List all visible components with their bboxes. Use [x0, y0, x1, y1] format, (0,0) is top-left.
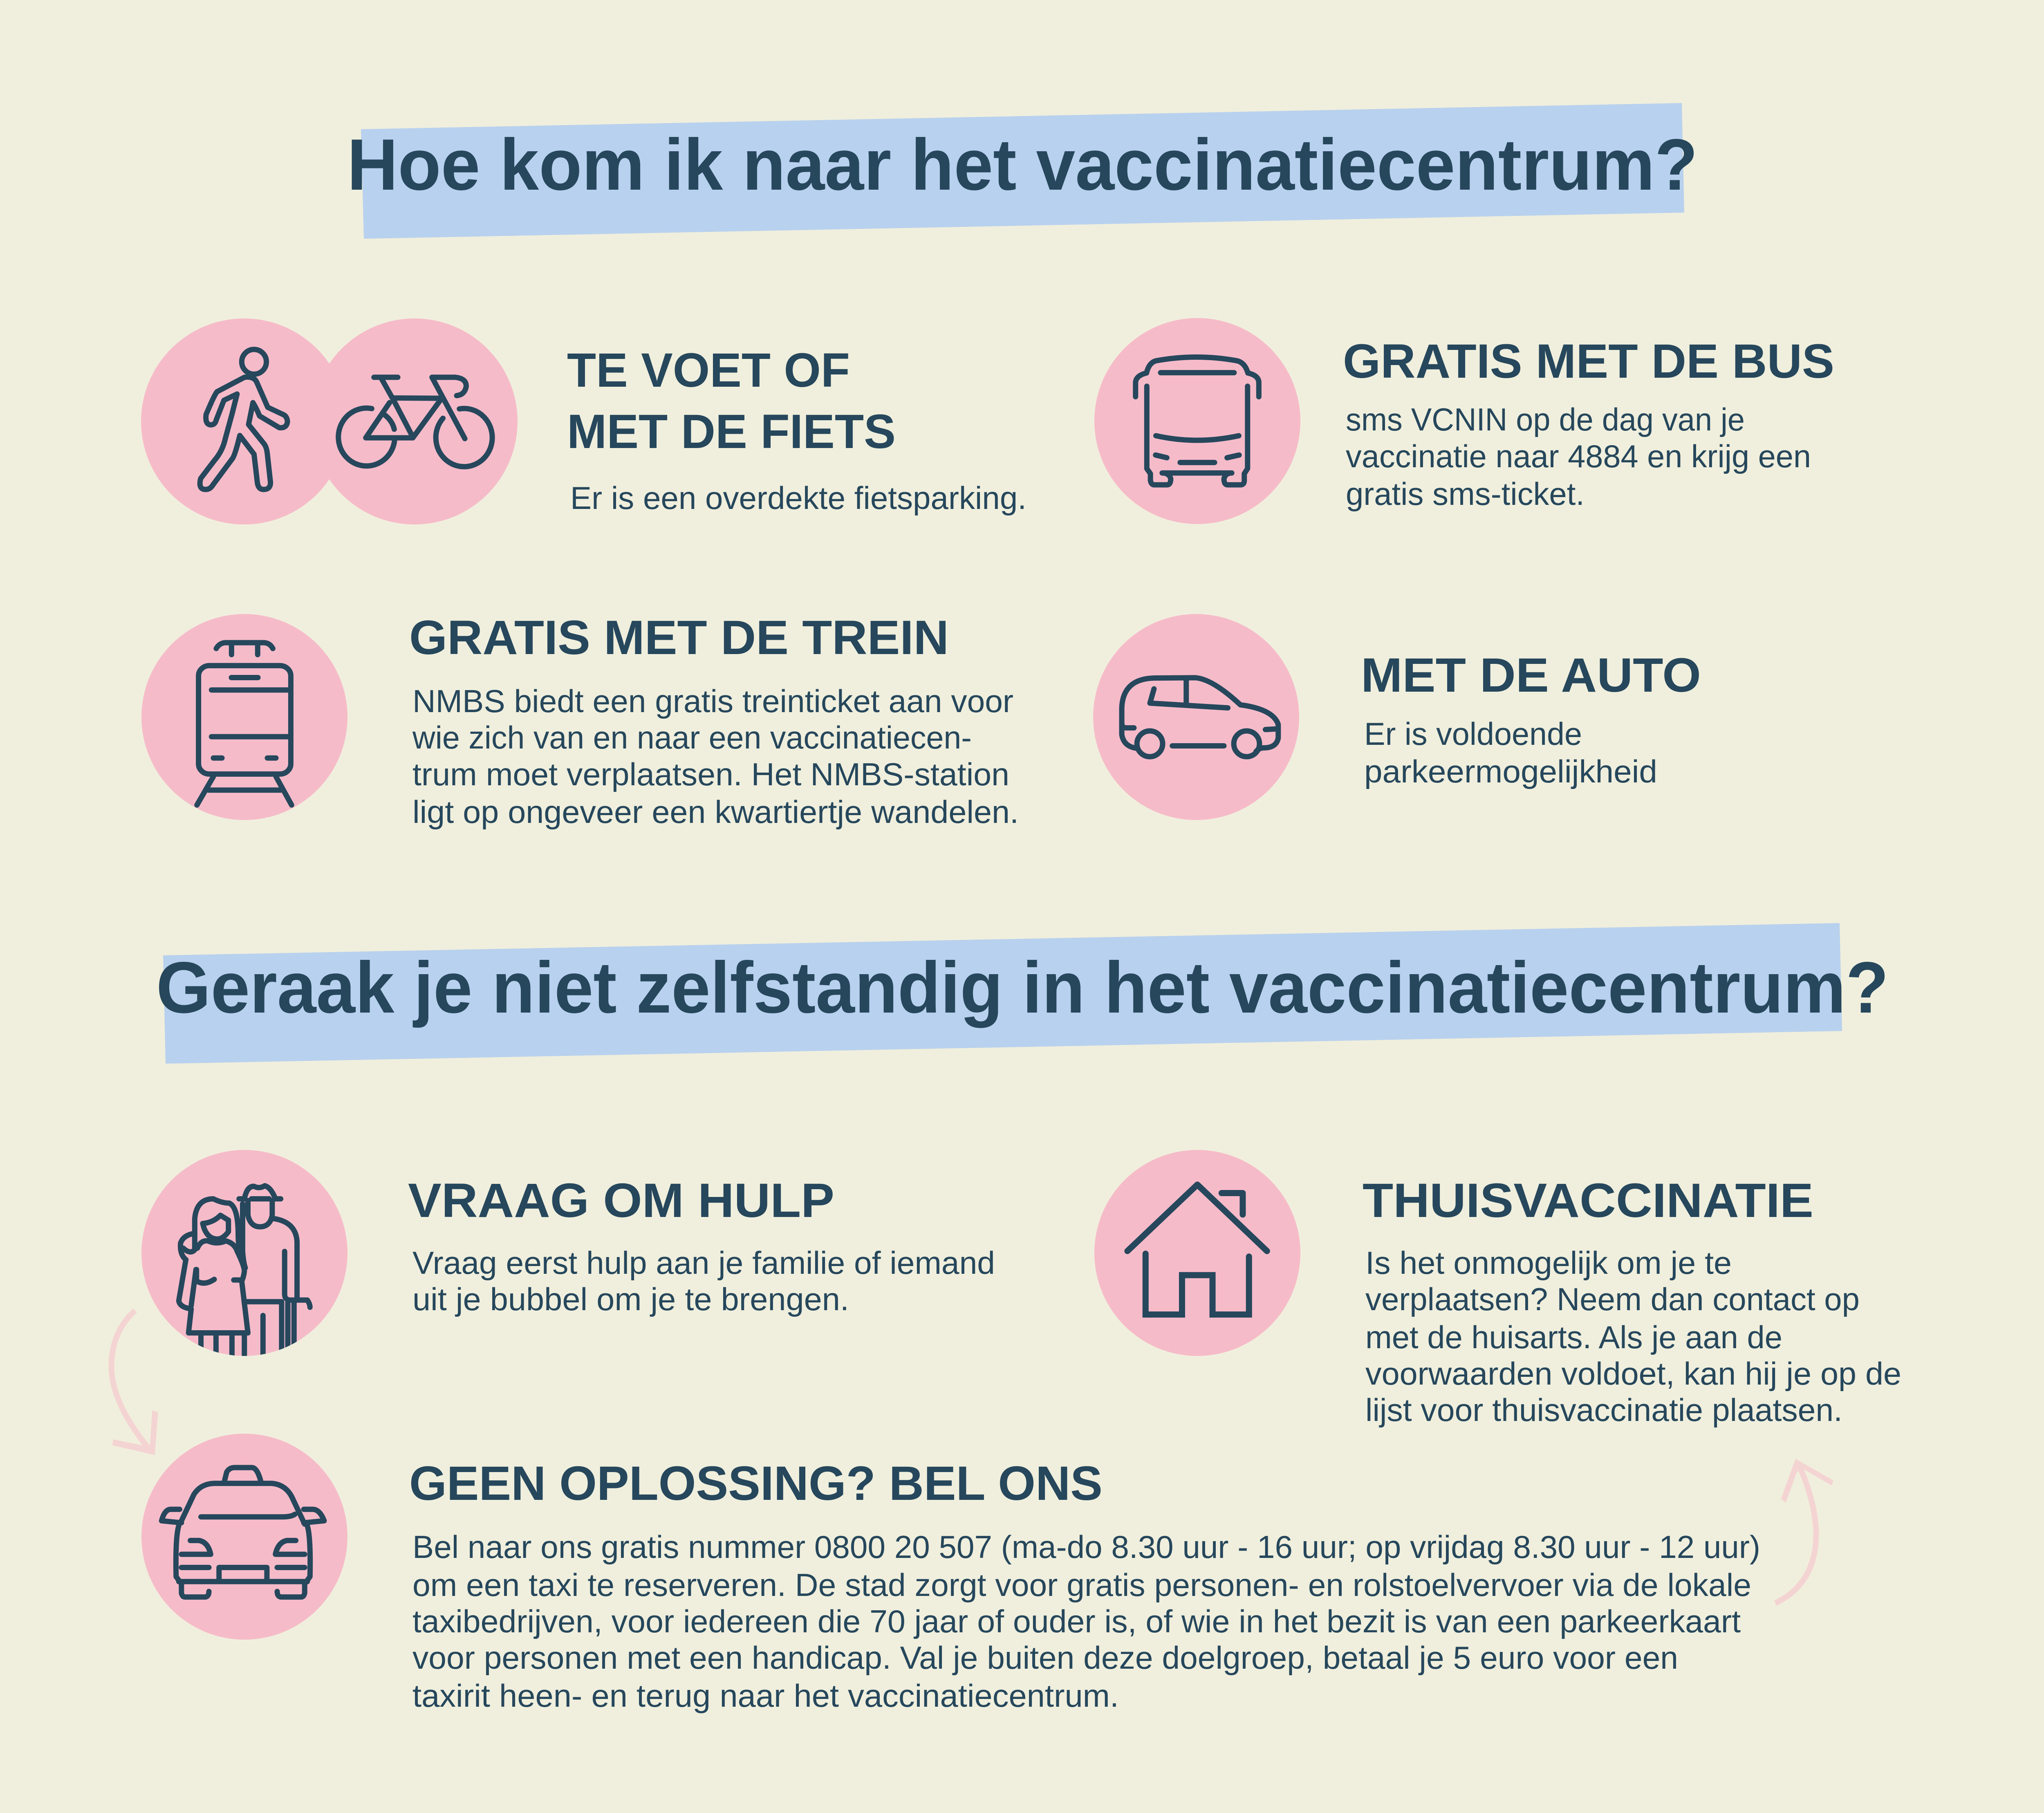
text block: Is het onmogelijk om je te: [1365, 1245, 1732, 1281]
text block: Er is een overdekte fietsparking.: [570, 480, 1026, 516]
panel: gratis met de trein: [141, 611, 1019, 830]
text block: gratis sms-ticket.: [1346, 476, 1585, 512]
icon: train in pink circle: [141, 614, 347, 820]
icon: house in pink circle: [1094, 1150, 1300, 1356]
text block: [412, 1245, 995, 1317]
text block: taxibedrijven, voor iedereen die 70 jaar of ouder is, of wie in het bezit is van een parkeerkaart: [412, 1603, 1741, 1639]
text block: wie zich van en naar een vaccinatiecen-: [412, 719, 972, 755]
text block: lijst voor thuisvaccinatie plaatsen.: [1365, 1392, 1842, 1428]
heading: TE VOET OF: [567, 343, 850, 397]
arrow: from hulp to taxi: [112, 1311, 158, 1455]
text block: verplaatsen? Neem dan contact op: [1365, 1281, 1860, 1317]
section 1 heading with blue banner: [347, 103, 1698, 239]
text block: ligt op ongeveer een kwartiertje wandelen.: [412, 794, 1019, 830]
icon: taxi in pink circle: [141, 1434, 347, 1640]
text block: Vraag eerst hulp aan je familie of iemand: [412, 1245, 995, 1281]
icon: car in pink circle: [1093, 614, 1299, 820]
section 2 heading with blue banner: [156, 923, 1889, 1064]
text block: Bel naar ons gratis nummer 0800 20 507 (ma-do 8.30 uur - 16 uur; op vrijdag 8.30 uur - 12 uur): [412, 1529, 1760, 1565]
heading: VRAAG OM HULP: [408, 1174, 834, 1228]
text block: trum moet verplaatsen. Het NMBS-station: [412, 756, 1009, 792]
heading: [567, 343, 896, 459]
section 2 heading with blue banner: Geraak je niet zelfstandig in het vaccinatiecentrum?: [156, 947, 1889, 1028]
text block: taxirit heen- en terug naar het vaccinatiecentrum.: [412, 1678, 1119, 1714]
icon: bus in pink circle: [1094, 318, 1300, 524]
panel: thuisvaccinatie: [1094, 1150, 1901, 1428]
text block: [412, 683, 1019, 830]
text block: Er is voldoende: [1364, 716, 1582, 752]
icon: elderly couple in pink circle: [141, 1150, 347, 1360]
text block: parkeermogelijkheid: [1364, 753, 1657, 789]
text block: om een taxi te reserveren. De stad zorgt voor gratis personen- en rolstoelvervoer via de lokale: [412, 1567, 1751, 1603]
heading: GEEN OPLOSSING? BEL ONS: [409, 1457, 1103, 1510]
icon: walking person and bicycle in pink circles: [141, 318, 518, 524]
text block: [1346, 401, 1811, 512]
panel: te voet of met de fiets: [141, 318, 1026, 524]
panel: vraag om hulp: [141, 1150, 995, 1360]
heading: GRATIS MET DE TREIN: [409, 611, 949, 665]
heading: MET DE FIETS: [567, 405, 896, 459]
heading: GRATIS MET DE BUS: [1343, 334, 1834, 388]
text block: uit je bubbel om je te brengen.: [412, 1281, 849, 1317]
text block: voor personen met een handicap. Val je buiten deze doelgroep, betaal je 5 euro voor een: [412, 1640, 1678, 1676]
text block: NMBS biedt een gratis treinticket aan voor: [412, 683, 1013, 719]
heading: MET DE AUTO: [1361, 648, 1701, 702]
text block: vaccinatie naar 4884 en krijg een: [1346, 438, 1811, 474]
text block: [412, 1529, 1760, 1714]
panel: geen oplossing bel ons: [141, 1434, 1760, 1714]
section 1 heading with blue banner: Hoe kom ik naar het vaccinatiecentrum?: [347, 124, 1698, 205]
panel: gratis met de bus: [1094, 318, 1834, 524]
text block: met de huisarts. Als je aan de: [1365, 1319, 1782, 1355]
panel: met de auto: [1093, 614, 1701, 820]
text block: voorwaarden voldoet, kan hij je op de: [1365, 1356, 1901, 1392]
text block: sms VCNIN op de dag van je: [1346, 401, 1745, 437]
text block: [1365, 1245, 1901, 1428]
arrow: from bel ons up to thuisvaccinatie: [1775, 1459, 1833, 1603]
text block: [1364, 716, 1657, 789]
heading: THUISVACCINATIE: [1363, 1174, 1813, 1228]
